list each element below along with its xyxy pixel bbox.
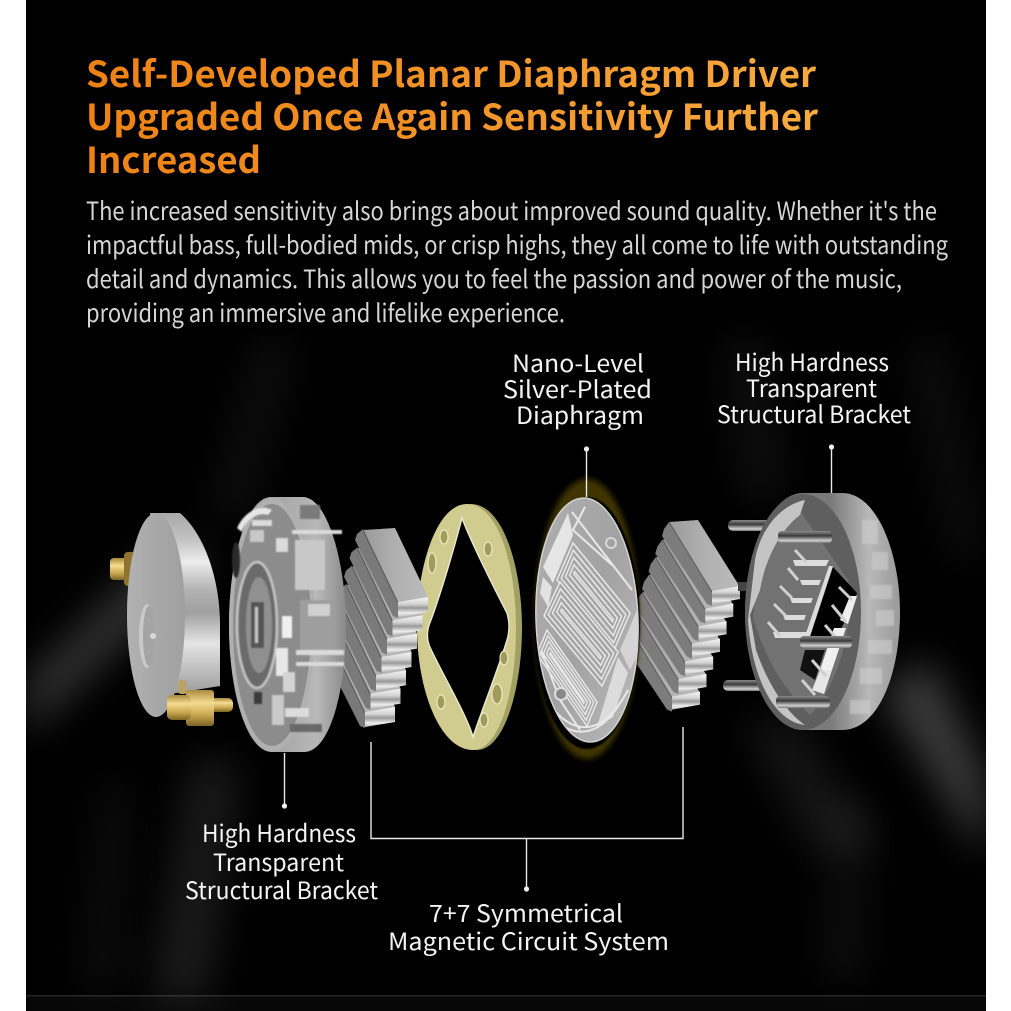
title: Self-Developed Planar Diaphragm Driver: [86, 46, 816, 98]
component: right magnet stack (7 bars): [622, 520, 740, 712]
inner diamond frame: [753, 507, 849, 715]
diamond window: [810, 567, 857, 650]
callout: magnetic circuit system: 7+7 Symmetrical: [429, 894, 623, 929]
gold glow: [535, 479, 639, 759]
callout: nano-level silver-plated diaphragm: Silver-Plated: [503, 370, 652, 405]
title: Increased: [86, 132, 261, 184]
component: grey magnet housing with gold pins: [110, 513, 233, 726]
callout: nano-level silver-plated diaphragm: Nano-Level: [512, 344, 644, 379]
callout: right structural bracket: [717, 343, 911, 493]
callout: right structural bracket: Transparent: [746, 369, 877, 404]
callout: magnetic circuit system: Magnetic Circuit System: [388, 922, 669, 957]
comb teeth: [773, 560, 857, 694]
icon: upper gold pin: [110, 552, 136, 586]
icon: left pins: [723, 520, 778, 691]
component: gold diamond ring: [417, 504, 522, 750]
callout: right structural bracket: High Hardness: [735, 343, 889, 378]
background light streaks: [26, 340, 986, 1000]
component: transparent structural bracket (left): [229, 497, 346, 752]
icon: lower gold pin: [167, 680, 233, 726]
frosted back blocks: [850, 520, 894, 714]
description text: providing an immersive and lifelike experience.: [86, 294, 565, 330]
component: silver-plated diaphragm: [532, 479, 642, 759]
diaphragm traces: [537, 507, 640, 732]
title: Upgraded Once Again Sensitivity Further: [86, 89, 818, 141]
description text: detail and dynamics. This allows you to feel the passion and power of the music,: [86, 260, 902, 296]
component: left magnet stack (7 bars): [322, 528, 428, 728]
horizontal pins: [776, 531, 852, 708]
callout: nano-level silver-plated diaphragm: [503, 344, 652, 497]
callout: nano-level silver-plated diaphragm: Diaphragm: [516, 396, 644, 431]
description text: [86, 192, 948, 330]
callout: left structural bracket: High Hardness: [202, 814, 356, 849]
title: [86, 46, 818, 184]
callout: right structural bracket: Structural Bracket: [717, 395, 911, 430]
callout: magnetic circuit system: [371, 727, 683, 957]
component: transparent structural bracket with pins (right): [723, 493, 900, 730]
callout: left structural bracket: Structural Bracket: [185, 871, 378, 906]
callout: left structural bracket: Transparent: [213, 843, 344, 878]
callout: left structural bracket: [185, 753, 378, 906]
